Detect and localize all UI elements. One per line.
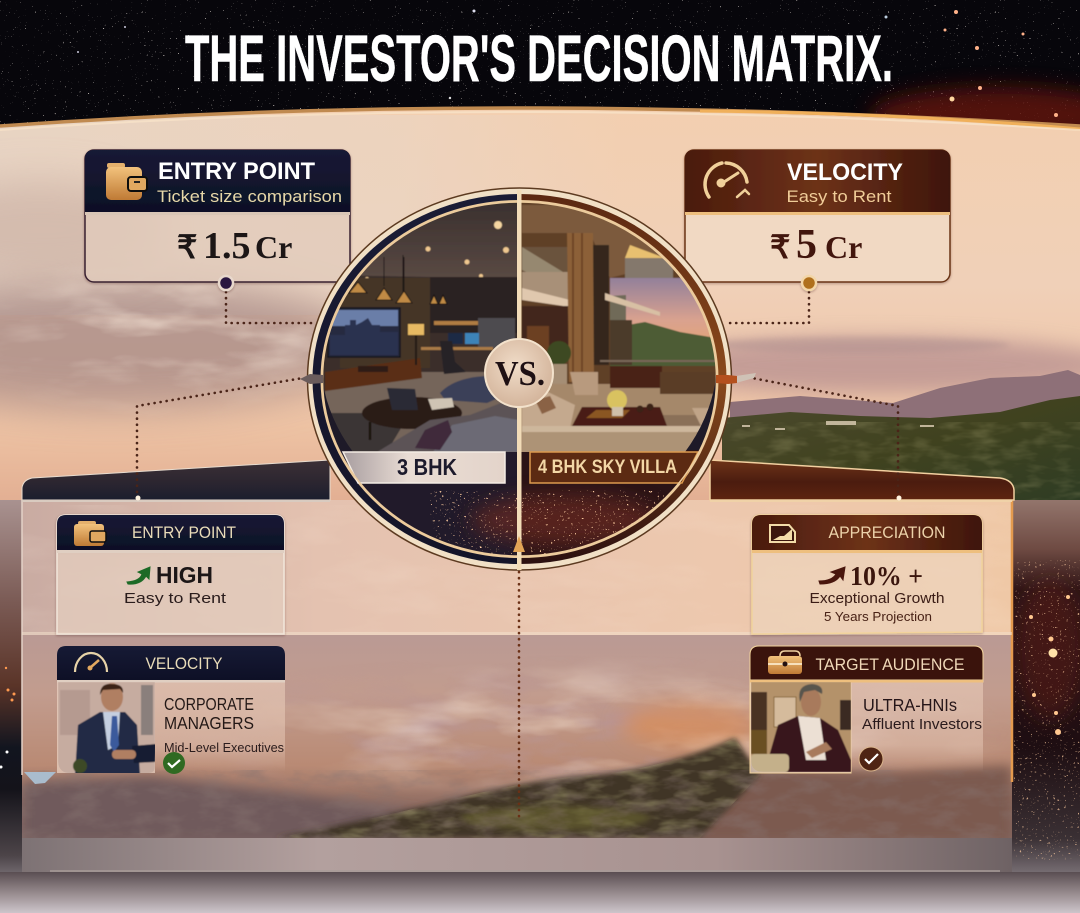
- building columns: [592, 245, 609, 365]
- bottom edge line: [50, 870, 1000, 872]
- icon: wallet: [106, 163, 147, 200]
- caption: Easy to Rent: [124, 590, 227, 607]
- distant houses: [742, 421, 934, 430]
- value: ₹: [770, 229, 790, 265]
- value: HIGH: [156, 562, 213, 588]
- floor lamp: [408, 324, 424, 335]
- audience caption: Affluent Investors: [862, 717, 982, 733]
- sectional sofa: [522, 392, 575, 428]
- connector end points: [136, 496, 902, 500]
- outer rings: [308, 188, 732, 570]
- VS. badge: VS.: [495, 354, 545, 393]
- inner gold ring: [322, 202, 716, 556]
- central comparison circle: [300, 188, 756, 570]
- audience title: ULTRA-HNIs: [863, 695, 957, 715]
- value: ₹: [177, 229, 197, 265]
- rocky ridge right: [701, 760, 1012, 838]
- icon: brown check: [859, 747, 883, 771]
- lower panel header bar, brown side: [710, 460, 1014, 500]
- star glitter, left: [430, 490, 519, 554]
- curtain: [567, 233, 594, 382]
- photo: 3 BHK living room: [320, 200, 520, 455]
- photo: 4 BHK sky villa lounge: [519, 200, 719, 455]
- card header navy: [57, 515, 284, 550]
- heading: ENTRY POINT: [158, 158, 315, 185]
- desk and monitors: [421, 347, 493, 350]
- coffee table: [572, 407, 667, 426]
- lower panel header bar, navy side: [22, 460, 330, 500]
- photo: corporate manager: [58, 682, 156, 775]
- value: 10% +: [850, 561, 923, 591]
- star glitter, right: [519, 490, 669, 554]
- value: 1.5: [203, 225, 250, 267]
- heading: ENTRY POINT: [132, 524, 236, 542]
- floor: [325, 372, 519, 454]
- photo: ultra-HNI investor: [751, 682, 851, 772]
- plate: 3 BHK: [343, 452, 505, 483]
- icon: green arrow: [127, 567, 150, 584]
- value: Cr: [255, 229, 292, 265]
- card: entry point high: [57, 515, 284, 634]
- upper balcony: [522, 246, 568, 272]
- hill vegetation: [275, 735, 765, 840]
- icon: gauge: [75, 653, 107, 672]
- distant hills: [610, 322, 716, 366]
- terrace floor: [519, 384, 719, 454]
- central divider: [513, 190, 525, 570]
- panel gold right edge: [1011, 500, 1013, 782]
- value: 5: [796, 222, 817, 268]
- star glitter glow: [470, 495, 660, 545]
- dining set and railing: [600, 360, 716, 362]
- card header navy: [57, 646, 285, 680]
- cream left wash: [0, 115, 477, 300]
- ottoman: [440, 376, 496, 404]
- laptop: [387, 388, 418, 410]
- green hill: [275, 738, 760, 838]
- window sunset sky: [609, 277, 710, 338]
- TV console: [325, 358, 422, 391]
- heading: VELOCITY: [787, 159, 903, 186]
- card header brown: [752, 515, 982, 550]
- caption: Exceptional Growth: [810, 590, 944, 607]
- forest: [722, 396, 1080, 505]
- fog strip: [22, 838, 1012, 872]
- starfield base, left: [322, 450, 519, 560]
- starfield base, right: [522, 450, 699, 555]
- card header brown: [685, 150, 950, 212]
- card: velocity price: [685, 150, 950, 290]
- plate: 4 BHK sky villa: 4 BHK SKY VILLA: [538, 456, 677, 478]
- coffee table: [362, 397, 462, 429]
- icon: growth chart: [770, 525, 795, 542]
- sofa: [378, 403, 517, 452]
- card: appreciation: [752, 515, 982, 634]
- subheading: Ticket size comparison: [157, 187, 342, 206]
- connector node: [219, 276, 233, 290]
- dotted connector lines: [137, 292, 898, 820]
- card: velocity audience: [57, 646, 285, 775]
- lower panel: [22, 460, 1030, 872]
- heading: TARGET AUDIENCE: [816, 656, 964, 674]
- rocky ground left: [22, 776, 430, 842]
- connector node: [802, 276, 816, 290]
- card: entry point ticket size: [85, 150, 350, 290]
- plate: 4 BHK sky villa: [530, 452, 698, 483]
- sub caption: 5 Years Projection: [824, 610, 932, 624]
- audience title second line: MANAGERS: [164, 713, 254, 733]
- far mountain ridge: [730, 370, 1080, 418]
- icon: speedometer gauge: [705, 163, 749, 197]
- fold accent: [24, 772, 56, 784]
- audience title: CORPORATE: [164, 694, 254, 714]
- value: Cr: [825, 229, 862, 265]
- VS. badge: [485, 339, 553, 407]
- rock texture: [22, 770, 1012, 838]
- icon: briefcase: [768, 651, 802, 674]
- audience caption: Mid-Level Executives: [164, 740, 284, 755]
- icon: green check: [163, 752, 185, 774]
- side sofa: [692, 408, 716, 432]
- subheading: Easy to Rent: [786, 187, 892, 206]
- right marker: [716, 373, 756, 384]
- card: target audience: [750, 646, 983, 773]
- heading: VELOCITY: [146, 655, 222, 673]
- plant: [547, 341, 571, 365]
- left marker: [300, 374, 323, 384]
- wall TV: [328, 308, 400, 357]
- top arc edge of the scroll panel: [0, 108, 1080, 130]
- rug: [663, 415, 700, 433]
- bottom fog fade: [0, 872, 1080, 913]
- flowers: [607, 390, 627, 410]
- icon: brown arrow: [819, 567, 845, 584]
- heading: APPRECIATION: [828, 524, 946, 542]
- card header navy: [85, 150, 350, 212]
- lounge chair: [570, 372, 598, 395]
- card header brown: [750, 646, 983, 680]
- plate: 3 BHK: 3 BHK: [397, 454, 457, 480]
- icon: wallet: [74, 521, 106, 546]
- pendant lights: [349, 255, 447, 304]
